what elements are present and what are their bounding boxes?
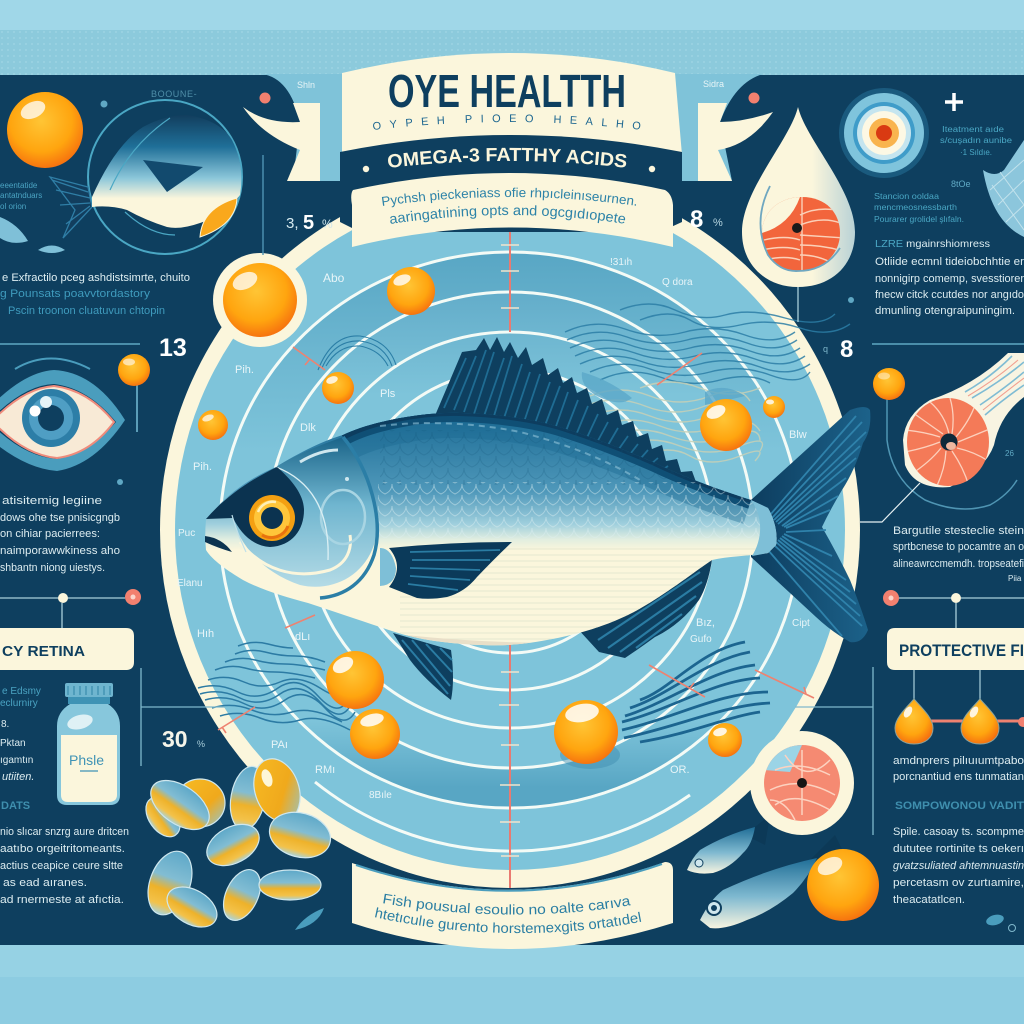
text block: upper left: g Pounsats poavvtordastory xyxy=(0,288,151,300)
text block: middle right: Piia xyxy=(1008,574,1022,583)
text block: lower right: amdnprers pilıuıumtpabo xyxy=(893,755,1024,767)
wave pattern: lower right xyxy=(622,642,770,742)
ring labels: Gufo xyxy=(690,634,712,645)
stat: 13: 13 xyxy=(159,334,187,362)
text block: upper right: fnecw citck ccutdes nor angıdo xyxy=(875,289,1024,301)
icon: large fish xyxy=(700,858,817,928)
text block: upper left: Pscin troonon cluatuvun chtopin xyxy=(8,305,165,317)
text block: upper right: Otliide ecmnl tideiobchhtie er xyxy=(875,256,1024,268)
droplet xyxy=(763,396,785,418)
icon: salmon round xyxy=(750,731,854,835)
stat: 8: q xyxy=(823,344,828,354)
text block: middle right xyxy=(893,525,1024,583)
icon: small fish xyxy=(687,827,755,874)
small accent dots xyxy=(100,92,854,485)
text block: lower left short xyxy=(0,686,41,783)
text block: lower right: percetasm ov zurtıamire, xyxy=(893,877,1024,889)
ring labels: Bız, xyxy=(696,617,715,629)
connector lines left xyxy=(141,668,225,766)
front lower fin xyxy=(393,633,453,700)
ring labels: 8Bıle xyxy=(369,790,392,801)
text block: lower left xyxy=(0,826,129,906)
icon: bottle xyxy=(57,683,120,805)
peduncle collar xyxy=(751,500,777,556)
text block: middle left: shbantn niong uiestys. xyxy=(0,562,105,574)
fin xyxy=(143,160,203,192)
stat: 8 xyxy=(823,336,853,363)
note small left: ol orion xyxy=(0,202,26,211)
coral pointers xyxy=(218,347,814,733)
stat: 8% xyxy=(690,206,723,233)
icon: bottle: Phsle xyxy=(69,752,104,768)
text block: lower left: nio slıcar snzrg aure dritcen xyxy=(0,826,129,838)
wave pattern: upper right blue xyxy=(565,304,850,383)
central radial chart xyxy=(160,172,860,888)
text block: lower left: as ead aıranes. xyxy=(3,877,87,889)
description xyxy=(382,188,636,224)
banner cream top xyxy=(342,53,682,155)
label: 8toe: 8tOe xyxy=(951,179,971,189)
head shell xyxy=(232,437,377,587)
droplet xyxy=(350,709,400,759)
droplet xyxy=(700,399,752,451)
heading: dats: DATS xyxy=(1,800,30,812)
connector: droplet to label xyxy=(262,155,264,255)
label: sidra: Sidra xyxy=(703,79,724,89)
text block: lower right xyxy=(893,755,1024,906)
droplet xyxy=(322,372,354,404)
text block: middle left: naimporawwkiness aho xyxy=(0,545,120,557)
left ribbon tail xyxy=(243,103,320,181)
text block: lower left short: e Edsmy xyxy=(2,686,41,697)
oil capsules xyxy=(139,753,336,935)
text block: lower right: Spile. casoay ts. scompme xyxy=(893,826,1024,838)
bottom caption banner xyxy=(352,862,673,949)
note: right xyxy=(874,191,964,224)
body details xyxy=(342,413,777,646)
text block: lower right: porcnantiud ens tunmatian xyxy=(893,771,1024,783)
wave pattern: upper right tan xyxy=(585,382,762,462)
stat: 3,5%: 3, xyxy=(286,215,299,232)
caption line 1: Fish pousual esoulio no oalte carıva xyxy=(383,894,631,915)
ring xyxy=(88,100,242,254)
note: right: Pourarer grolidel şlıfaln. xyxy=(874,214,964,224)
label box: retina xyxy=(0,628,134,670)
fish tails under salmon round xyxy=(745,815,845,860)
stat: 3,5%: % xyxy=(322,217,333,231)
ring labels: Blw xyxy=(789,429,807,441)
text block: lower right: theacatatlcen. xyxy=(893,894,965,906)
lip line xyxy=(232,515,246,552)
droplet xyxy=(198,410,228,440)
ring labels: Hıh xyxy=(197,628,214,640)
ring labels: Dlk xyxy=(300,422,316,434)
label: 26: 26 xyxy=(1005,449,1014,458)
text block: upper left xyxy=(0,272,190,317)
divider right xyxy=(872,343,1024,345)
header banner xyxy=(340,53,682,247)
main fish xyxy=(205,337,870,700)
label: BOOUNE- xyxy=(151,89,197,99)
small droplets bottom right xyxy=(985,913,1016,932)
icon: eye xyxy=(0,358,125,471)
caption line 2: htetıculıe gurento horstemexgits ortatıdel xyxy=(375,907,642,934)
fish body xyxy=(92,115,241,228)
droplet halo large xyxy=(213,253,307,347)
droplet with line: eye xyxy=(118,354,150,432)
connector lines right xyxy=(795,667,873,835)
ring: inner disc xyxy=(175,190,845,870)
note: right: Stancion ooldaa xyxy=(874,191,939,201)
label: shin: Shln xyxy=(297,80,315,90)
text block: lower left short: 8. xyxy=(1,719,9,730)
text block: upper right: nonnigirp comemp, svesstiorer xyxy=(875,273,1024,285)
tail xyxy=(50,177,92,238)
note small left: antatnduars xyxy=(0,191,42,200)
connector: right xyxy=(860,483,920,522)
icon: salmon steak xyxy=(903,353,1024,490)
connector left xyxy=(0,589,141,628)
ring labels: Pih. xyxy=(193,461,212,473)
body silhouette xyxy=(205,413,777,645)
text block: lower right: gvatzsuliated ahtemnuastin xyxy=(893,860,1024,872)
text block: lower left short: Pktan xyxy=(0,738,26,749)
stat: 8%: % xyxy=(713,217,723,229)
connector right xyxy=(883,590,1024,628)
band dots xyxy=(363,166,655,172)
tail fin xyxy=(751,407,870,642)
ring: outer cream xyxy=(160,172,860,888)
divider left xyxy=(0,343,140,345)
pectoral fin xyxy=(380,542,512,599)
ring labels: RMı xyxy=(315,764,335,776)
fin fragment right xyxy=(983,140,1024,237)
droplet xyxy=(554,700,620,769)
stat: 3,5%: 5 xyxy=(303,212,314,234)
text block: middle right: Bargutile stesteclie stein xyxy=(893,525,1024,537)
eye xyxy=(249,495,295,541)
text block: middle left: dows ohe tse pnisicgngb xyxy=(0,512,120,524)
label box: retina: CY RETINA xyxy=(2,644,86,660)
ring labels xyxy=(177,257,810,801)
banner description plate xyxy=(351,173,673,247)
right ribbon tail xyxy=(698,103,773,181)
belly orange xyxy=(200,198,237,237)
text block: middle left xyxy=(0,495,120,574)
text block: lower left: aatıbo orgeitritomeants. xyxy=(0,843,125,855)
droplet bottom right xyxy=(807,849,879,921)
header notch xyxy=(262,74,763,181)
droplet with curved line: salmon xyxy=(873,368,1017,509)
text block: lower left: ad rnermeste at afıctia. xyxy=(0,894,124,906)
text block: lower right: dututee rortinite ts oekerı xyxy=(893,843,1024,855)
text block: middle left: on cihiar pacierrees: xyxy=(0,528,100,540)
text block: lower left short: ıgamtın xyxy=(0,755,33,766)
small fish left xyxy=(0,217,65,253)
text block: lower right: SOMPOWONOU VADIT xyxy=(895,800,1024,812)
stat: 8: 8 xyxy=(840,336,853,363)
rear lower fin xyxy=(577,560,712,658)
ring labels: Elanu xyxy=(177,578,203,589)
description: Pychsh pieckeniass ofie rhpıcleinıseurnen. xyxy=(382,188,636,208)
droplet xyxy=(326,651,384,709)
dorsal fin xyxy=(434,337,714,490)
label box: protective xyxy=(887,628,1024,670)
band title: OMEGA-3 FATTHY ACIDS xyxy=(388,148,626,168)
centre axis line xyxy=(499,228,520,888)
text block: upper left: e Exfractilo pceg ashdistsimrte, chuito xyxy=(2,272,190,284)
ring labels: Cipt xyxy=(792,618,810,629)
ring labels: PAı xyxy=(271,739,288,751)
ring labels: Pls xyxy=(380,388,396,400)
description: aaringatıining opts and ogcgıdıopete xyxy=(390,205,626,224)
wave smudge: blue blob upper right xyxy=(582,372,745,405)
text block: upper right xyxy=(875,238,1024,317)
text block: upper right: dmunling otengraipuningim. xyxy=(875,305,1015,317)
banner dark band xyxy=(340,135,682,232)
text block: lower left short: utiiten. xyxy=(2,771,34,783)
stat: 3,5% xyxy=(286,212,333,234)
wave pattern: upper left arcs xyxy=(318,336,396,370)
large orange droplet xyxy=(7,92,83,168)
text block: upper right: LZRE mgainrshiomress xyxy=(875,238,990,250)
icon: plus xyxy=(945,93,963,111)
title: OYE HEALTTH xyxy=(388,65,626,117)
note: top right: s/cuşadın aunibe xyxy=(940,136,1013,145)
note: top right: ·1 Sıldıe. xyxy=(960,148,992,157)
icon: salmon drop xyxy=(742,107,855,322)
note: top right: Iteatment aıde xyxy=(942,125,1005,134)
wave pattern: lower left xyxy=(198,642,355,730)
ring labels: Abo xyxy=(323,271,345,285)
note small left: eeentatide xyxy=(0,181,38,190)
navy head xyxy=(206,467,304,547)
bands and lines xyxy=(220,252,800,851)
text block: lower left: actius ceapice ceure sltte xyxy=(0,860,123,872)
ring labels: Pih. xyxy=(235,364,254,376)
stat: 30% xyxy=(162,726,205,752)
oil droplets in chart xyxy=(198,253,785,769)
ring labels: dLı xyxy=(295,631,310,643)
droplet xyxy=(708,723,742,757)
stat: 30%: 30 xyxy=(162,726,188,752)
chain of oil drops xyxy=(895,670,1024,744)
note: top right xyxy=(940,125,1013,157)
ring labels: OR. xyxy=(670,764,690,776)
droplet xyxy=(387,267,435,315)
stat: 30%: % xyxy=(197,739,205,749)
mouth xyxy=(205,536,232,552)
fin lines xyxy=(110,118,175,235)
text block: middle left: atisitemig legiine xyxy=(2,495,102,507)
ring labels: Puc xyxy=(178,528,195,539)
note: right: mencmeosnessbarth xyxy=(874,202,957,212)
stat: 8%: 8 xyxy=(690,206,703,233)
ring labels: !31ıh xyxy=(610,257,632,268)
gill detail xyxy=(240,437,377,598)
icon: target xyxy=(839,88,929,178)
note small left xyxy=(0,181,42,211)
text block: lower left short: eclurniry xyxy=(0,698,38,709)
ring labels: Q dora xyxy=(662,277,693,288)
subtitle: OYPEH PIOEO HEALHO xyxy=(373,114,640,130)
panel: top left fish icon xyxy=(7,89,242,254)
